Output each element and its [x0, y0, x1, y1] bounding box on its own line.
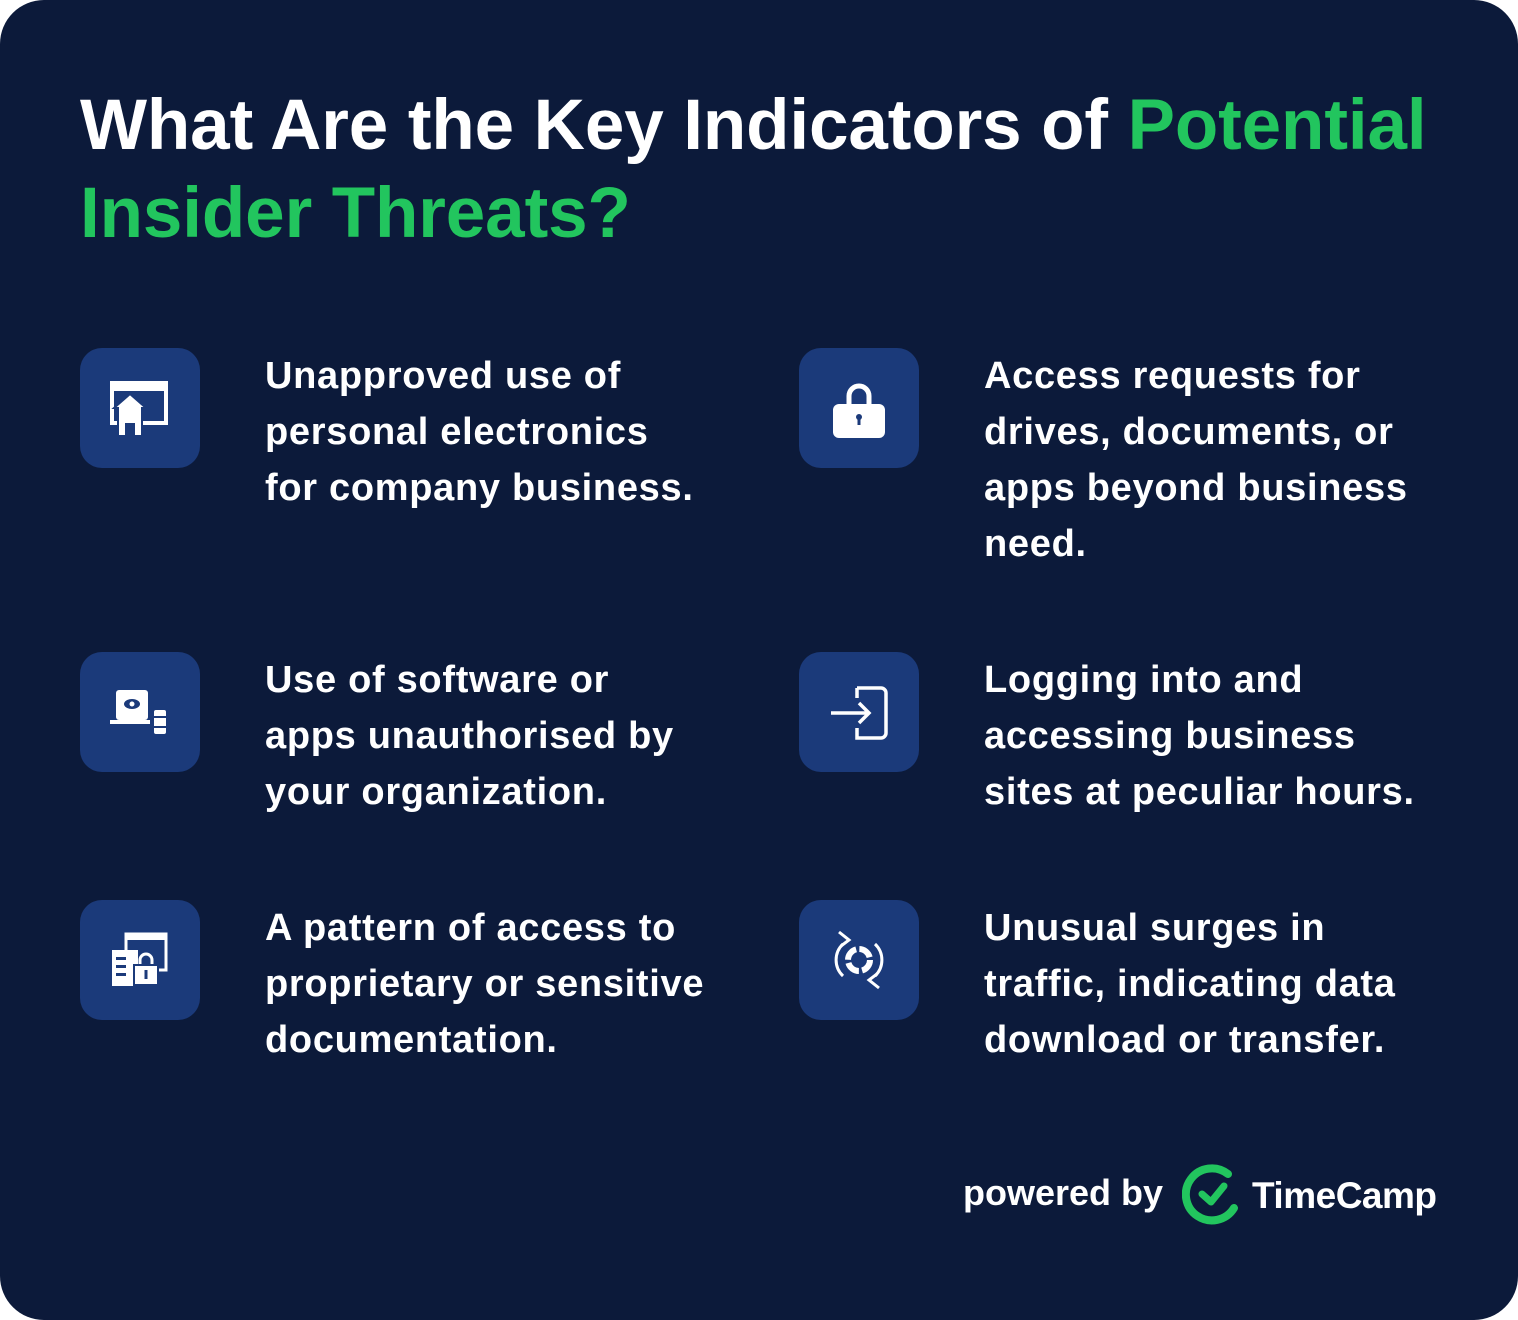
icon: laptop eye [80, 652, 200, 772]
logo: TimeCamp [1182, 1164, 1436, 1224]
text: item 5: documentation. [265, 1019, 558, 1061]
text: item 1: Unapproved use of [265, 355, 621, 397]
text: item 1 [265, 355, 694, 509]
title: Insider Threats? [80, 174, 631, 253]
footer text: powered by [963, 1172, 1163, 1213]
text: item 6: traffic, indicating data [984, 963, 1396, 1005]
logo: TimeCamp: TimeCamp [1252, 1175, 1436, 1216]
text: item 1: for company business. [265, 467, 694, 509]
icon: lock [799, 348, 919, 468]
text: item 4 [984, 659, 1415, 813]
icon: sync [799, 900, 919, 1020]
text: item 3: your organization. [265, 771, 607, 813]
text: item 3: Use of software or [265, 659, 609, 701]
text: item 3: apps unauthorised by [265, 715, 674, 757]
icon: login [799, 652, 919, 772]
text: item 4: accessing business [984, 715, 1356, 757]
title: What Are the Key Indicators of Potential [80, 86, 1427, 165]
text: item 2: need. [984, 523, 1087, 565]
title [80, 86, 1427, 253]
text: item 6 [984, 907, 1396, 1061]
text: item 6: Unusual surges in [984, 907, 1325, 949]
text: item 3 [265, 659, 674, 813]
icon: browser home [80, 348, 200, 468]
text: item 2 [984, 355, 1408, 565]
text: item 2: Access requests for [984, 355, 1361, 397]
text: item 5 [265, 907, 704, 1061]
text: item 1: personal electronics [265, 411, 649, 453]
text: item 4: Logging into and [984, 659, 1303, 701]
text: item 6: download or transfer. [984, 1019, 1385, 1061]
text: item 4: sites at peculiar hours. [984, 771, 1415, 813]
text: item 5: proprietary or sensitive [265, 963, 704, 1005]
text: item 5: A pattern of access to [265, 907, 676, 949]
text: item 2: apps beyond business [984, 467, 1408, 509]
text: item 2: drives, documents, or [984, 411, 1394, 453]
icon: documents lock [80, 900, 200, 1020]
